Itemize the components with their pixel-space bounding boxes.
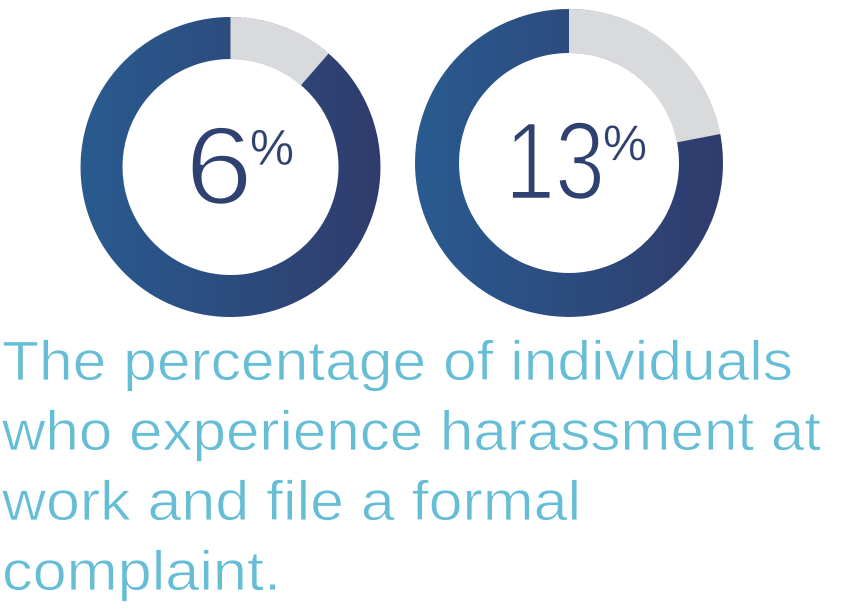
value: 13%: % — [603, 115, 647, 171]
donut segment: grey share — [569, 9, 720, 142]
caption text — [1, 329, 821, 602]
value: 13%: 13 — [505, 100, 605, 223]
caption text: The percentage of individuals — [2, 329, 793, 392]
donut ring: dark share — [102, 38, 360, 296]
donut ring: dark share — [437, 31, 701, 295]
caption text: complaint. — [2, 539, 281, 602]
caption text: work and file a formal — [1, 469, 581, 532]
donut chart: 6% — [102, 17, 360, 296]
donut chart: 13% — [437, 9, 720, 295]
value: 6%: % — [250, 120, 294, 176]
caption text: who experience harassment at — [1, 399, 821, 462]
donut segment: grey share — [230, 17, 329, 85]
value: 6% — [185, 105, 294, 228]
value: 6%: 6 — [185, 105, 253, 228]
